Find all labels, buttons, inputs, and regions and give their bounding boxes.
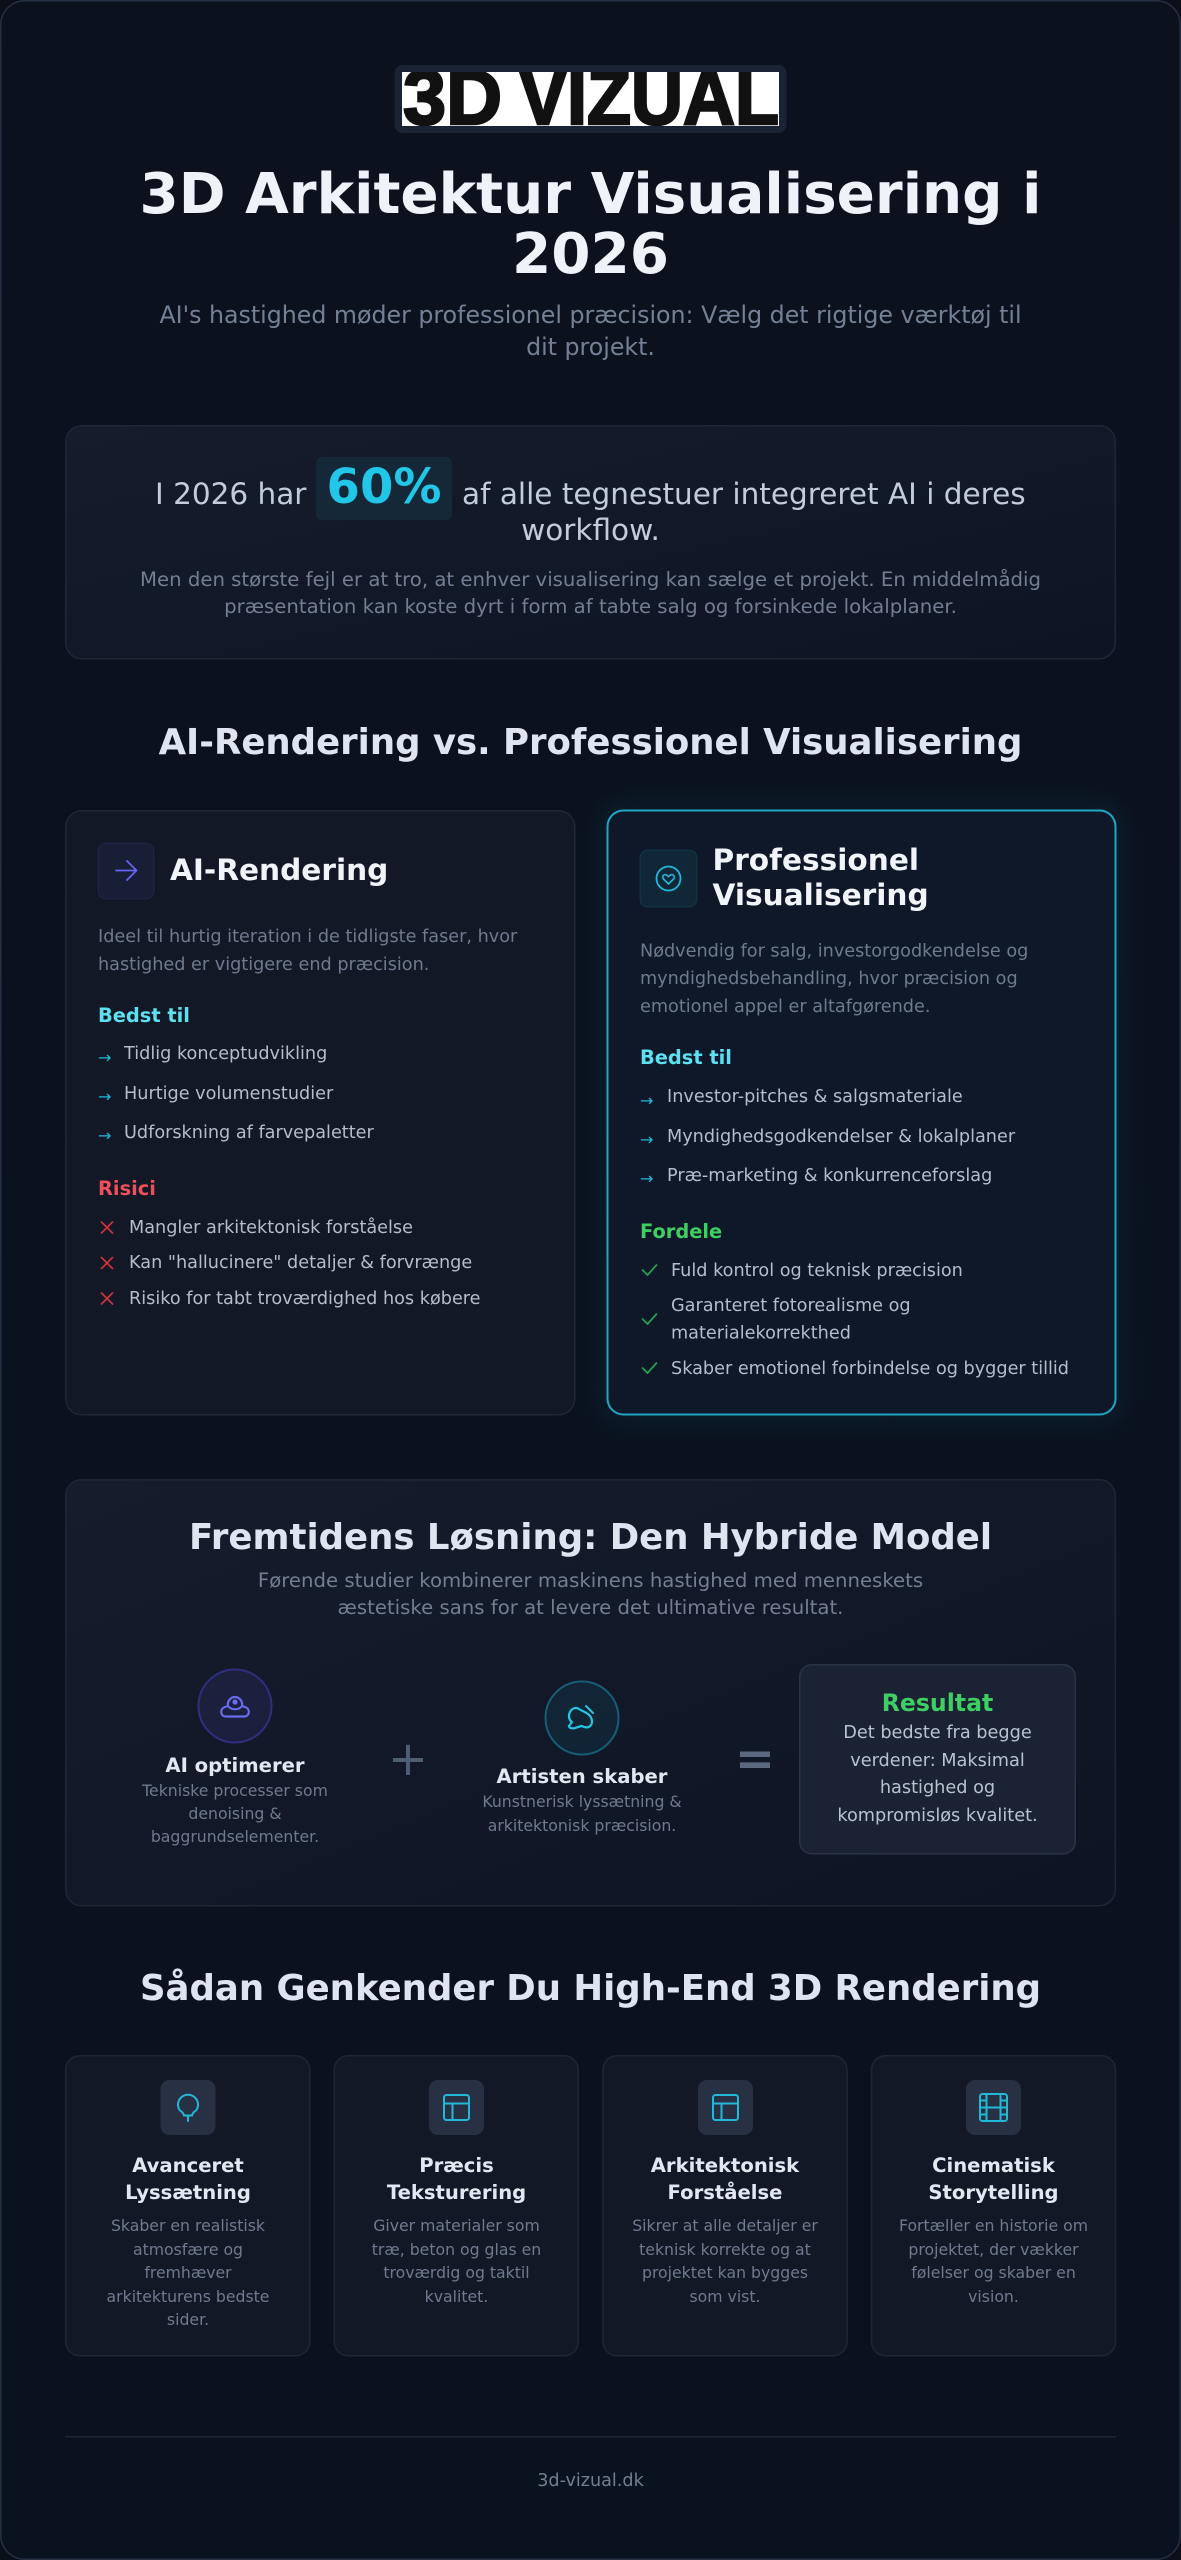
card description: Nødvendig for salg, investorgodkendelse og (640, 942, 1028, 962)
best-for list: Bedst til (640, 1046, 732, 1069)
best-for list: Præ-marketing & konkurrenceforslag (667, 1166, 992, 1186)
card: Avanceret Lyssætning: Avanceret (132, 2154, 244, 2177)
subtitle: dit projekt. (526, 333, 655, 361)
step: AI optimerer (141, 1670, 328, 1846)
result box: Det bedste fra begge (843, 1723, 1032, 1743)
icon: artist brush (546, 1682, 618, 1754)
card: Arkitektonisk Forståelse: Forståelse (668, 2180, 782, 2204)
card title (712, 843, 929, 912)
title (139, 162, 1042, 287)
card: Cinematisk Storytelling: følelser og skaber en (911, 2263, 1076, 2282)
benefits list: Skaber emotionel forbindelse og bygger tillid (671, 1359, 1069, 1379)
risks list: Risici (98, 1177, 156, 1200)
card: Arkitektonisk Forståelse: teknisk korrekte og at (639, 2240, 811, 2259)
hybrid intro (258, 1569, 923, 1619)
risks list (98, 1177, 481, 1309)
card description: myndighedsbehandling, hvor præcision og (640, 969, 1018, 989)
result box (800, 1665, 1075, 1854)
best-for list: → (98, 1087, 111, 1106)
icon: arrow (98, 843, 154, 899)
statistic sentence: af alle tegnestuer integreret AI i deres (462, 477, 1026, 511)
risks list: Mangler arkitektonisk forståelse (129, 1217, 413, 1238)
best-for list: Investor-pitches & salgsmateriale (667, 1087, 963, 1107)
card: Cinematisk Storytelling: projektet, der vækker (908, 2240, 1079, 2259)
step: AI optimerer: AI optimerer (165, 1754, 305, 1777)
icon: lightbulb (160, 2080, 216, 2135)
best-for list: Udforskning af farvepaletter (124, 1123, 374, 1143)
best-for list (98, 1004, 374, 1145)
step: Artisten skaber: Artisten skaber (497, 1765, 668, 1788)
logo (394, 65, 786, 133)
card: Avanceret Lyssætning: Skaber en realistisk (111, 2216, 266, 2235)
card: Præcis Teksturering: Teksturering (387, 2181, 526, 2204)
card: Avanceret Lyssætning: fremhæver (144, 2263, 232, 2282)
step: Artisten skaber: arkitektonisk præcision. (488, 1816, 676, 1835)
card title: Visualisering (712, 878, 929, 912)
panel: hybrid model (66, 1480, 1115, 1906)
hybrid intro: æstetiske sans for at levere det ultimative resultat. (338, 1596, 843, 1619)
logo: VIZUAL (519, 53, 779, 141)
card: Præcis Teksturering: troværdig og taktil (383, 2263, 530, 2282)
subtitle: AI's hastighed møder professionel præcision: Vælg det rigtige værktøj til (159, 301, 1022, 329)
logo: 3D (403, 53, 502, 141)
card: Præcis Teksturering: kvalitet. (425, 2287, 488, 2306)
statistic note: Men den største fejl er at tro, at enhver visualisering kan sælge et projekt. En middelmådig (140, 568, 1041, 591)
heading: hybrid: Fremtidens Løsning: Den Hybride Model (189, 1517, 992, 1558)
benefits list: Garanteret fotorealisme og (671, 1296, 911, 1316)
statistic sentence: workflow. (521, 513, 660, 547)
icon: layout (429, 2080, 484, 2135)
card: Præcis Teksturering: Giver materialer som (373, 2216, 540, 2235)
result box: kompromisløs kvalitet. (837, 1806, 1038, 1826)
panel: statistic (66, 426, 1115, 659)
card: Præcis Teksturering: Præcis (419, 2154, 494, 2177)
card: Avanceret Lyssætning: atmosfære og (133, 2240, 243, 2259)
best-for list: → (98, 1126, 111, 1145)
card description (98, 927, 518, 975)
card: Avanceret Lyssætning: Lyssætning (125, 2181, 251, 2204)
best-for list: → (640, 1091, 653, 1110)
card: Cinematisk Storytelling: vision. (968, 2287, 1019, 2306)
step: AI optimerer: denoising & (188, 1804, 282, 1823)
card title: Professionel (712, 843, 919, 877)
hybrid intro: Førende studier kombinerer maskinens hastighed med menneskets (258, 1569, 923, 1592)
card description: emotionel appel er altafgørende. (640, 997, 930, 1017)
card description: hastighed er vigtigere end præcision. (98, 955, 429, 975)
risks list: Kan "hallucinere" detaljer & forvrænge (129, 1253, 472, 1273)
card: Cinematisk Storytelling: Storytelling (928, 2181, 1059, 2204)
statistic sentence (155, 457, 1026, 547)
heading: high-end: Sådan Genkender Du High-End 3D Rendering (140, 1968, 1041, 2009)
best-for list: Tidlig konceptudvikling (123, 1044, 327, 1064)
step: Artisten skaber (482, 1682, 682, 1835)
best-for list: Myndighedsgodkendelser & lokalplaner (667, 1127, 1016, 1147)
step: Artisten skaber: Kunstnerisk lyssætning & (482, 1792, 682, 1811)
panel: Professionel Visualisering (608, 810, 1116, 1414)
title: 3D Arkitektur Visualisering i (139, 162, 1042, 227)
step: AI optimerer: baggrundselementer. (151, 1827, 319, 1846)
card: Præcis Teksturering: træ, beton og glas en (372, 2240, 541, 2259)
best-for list: Bedst til (98, 1004, 190, 1027)
card description: Ideel til hurtig iteration i de tidligste faser, hvor (98, 927, 518, 947)
result box: verdener: Maksimal (850, 1751, 1025, 1771)
statistic sentence: 60% (327, 459, 441, 515)
best-for list: → (640, 1130, 653, 1149)
heading: comparison: AI-Rendering vs. Professionel Visualisering (159, 722, 1022, 763)
card: Præcis Teksturering (334, 2056, 578, 2356)
benefits list: Fuld kontrol og teknisk præcision (671, 1261, 963, 1281)
panel: AI-Rendering (66, 811, 575, 1415)
card: Arkitektonisk Forståelse: projektet kan bygges (642, 2263, 808, 2282)
card: Arkitektonisk Forståelse: som vist. (690, 2287, 760, 2306)
card: Cinematisk Storytelling: Fortæller en historie om (899, 2216, 1088, 2235)
statistic note (140, 568, 1041, 618)
card: Arkitektonisk Forståelse: Arkitektonisk (651, 2154, 800, 2177)
statistic note: præsentation kan koste dyrt i form af tabte salg og forsinkede lokalplaner. (224, 595, 957, 618)
card title: AI-Rendering (170, 853, 388, 887)
plus sign: + (388, 1731, 428, 1787)
icon: heart in circle (640, 850, 697, 907)
benefits list: Fordele (640, 1220, 722, 1243)
card: Avanceret Lyssætning: sider. (167, 2310, 209, 2329)
card: Arkitektonisk Forståelse: Sikrer at alle detaljer er (632, 2216, 818, 2235)
card: Cinematisk Storytelling (872, 2056, 1116, 2356)
subtitle (159, 301, 1022, 361)
card: Cinematisk Storytelling: Cinematisk (932, 2154, 1056, 2177)
step: AI optimerer: Tekniske processer som (141, 1781, 328, 1800)
result box: Resultat (882, 1689, 993, 1717)
benefits list (640, 1220, 1069, 1379)
footer: 3d-vizual.dk (537, 2471, 645, 2491)
result box: hastighed og (880, 1778, 995, 1798)
icon: film strip (966, 2080, 1021, 2135)
risks list: Risiko for tabt troværdighed hos købere (129, 1289, 481, 1309)
card: Avanceret Lyssætning (66, 2056, 310, 2356)
best-for list: Hurtige volumenstudier (124, 1084, 334, 1104)
icon: AI cloud (198, 1670, 272, 1742)
benefits list: materialekorrekthed (671, 1324, 851, 1344)
statistic sentence: I 2026 har (155, 477, 307, 511)
card description (640, 942, 1028, 1017)
best-for list (640, 1046, 1016, 1188)
card: Avanceret Lyssætning: arkitekturens bedste (107, 2287, 269, 2306)
best-for list: → (640, 1169, 653, 1188)
card: Arkitektonisk Forståelse (603, 2056, 847, 2356)
best-for list: → (98, 1048, 111, 1067)
icon: layout (698, 2080, 753, 2135)
equals sign: = (735, 1731, 775, 1787)
title: 2026 (512, 222, 669, 287)
